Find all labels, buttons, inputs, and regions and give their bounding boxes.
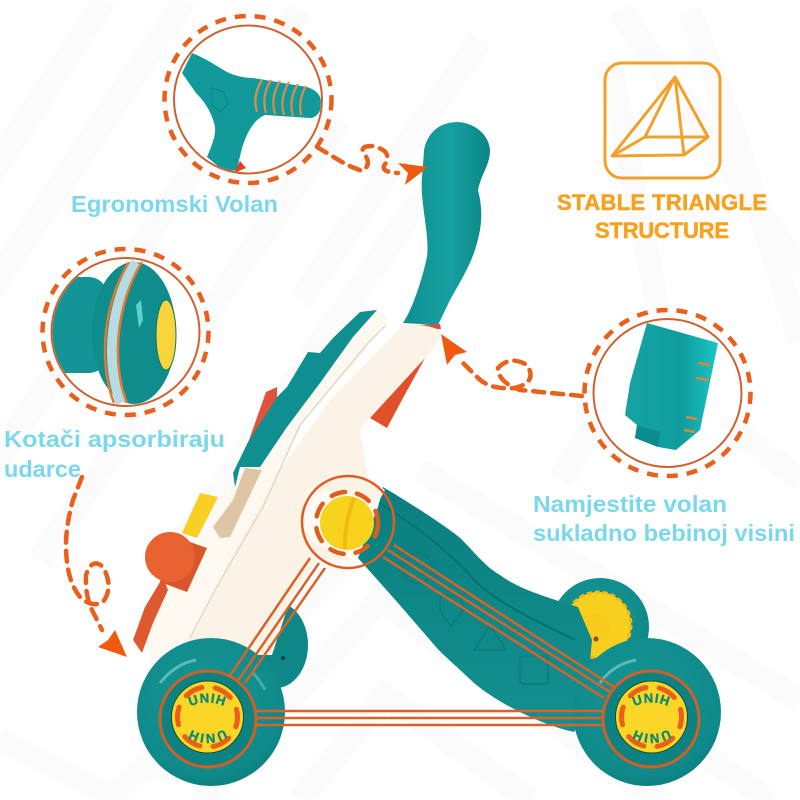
hub logo — [632, 693, 672, 744]
label: wheels absorb shocks: Kotači apsorbiraju — [4, 426, 225, 452]
red side piece — [248, 387, 277, 443]
wheel hub — [616, 681, 688, 753]
arm shape: triangle — [474, 625, 506, 650]
knob highlight circle — [302, 476, 394, 568]
stroller arm — [358, 487, 592, 732]
stroller hidden left wheel — [244, 602, 308, 688]
heading: stable triangle structure: STRUCTURE — [595, 218, 729, 243]
label: ergonomic handle: Egronomski Volan — [71, 191, 278, 217]
yellow adjustment knob — [320, 496, 374, 550]
yellow block toy — [182, 493, 218, 538]
label: wheels absorb shocks: udarce — [4, 456, 81, 482]
callout: shock-absorbing wheel — [42, 249, 208, 415]
label: wheels absorb shocks — [4, 426, 225, 482]
stroller handle — [403, 122, 490, 329]
heading: stable triangle structure — [557, 190, 767, 243]
arm shape: circle — [402, 553, 432, 583]
wheel ring — [603, 671, 699, 767]
wheel close-up — [45, 262, 176, 404]
callout: adjustable handle connector — [584, 310, 750, 476]
knob bracket — [302, 487, 380, 560]
heading: stable triangle structure: STABLE TRIANGLE — [557, 190, 767, 215]
arrow: to handle base — [441, 334, 582, 396]
callout: ergonomic handle — [164, 16, 332, 183]
tan slot — [213, 468, 262, 538]
triangle structure lines — [229, 545, 614, 725]
wheel ring — [160, 671, 256, 767]
front-left wheel — [137, 638, 285, 786]
hub logo: UNIH — [632, 730, 672, 744]
handle red tab — [418, 324, 441, 329]
arm shape: shield — [440, 596, 462, 626]
red brace — [370, 358, 425, 428]
hub logo: UNIH — [188, 693, 226, 706]
stroller body — [133, 310, 440, 662]
hub logo — [188, 693, 228, 744]
body front panel — [145, 310, 386, 662]
stroller rear wheel — [551, 578, 649, 676]
front-right wheel — [575, 638, 721, 786]
arrow: to front wheel — [66, 477, 127, 657]
arrow: to handle top — [317, 146, 428, 185]
connector close-up — [625, 323, 718, 450]
panel seam — [190, 325, 386, 638]
icon: pyramid in rounded square — [605, 63, 720, 178]
red stick toy — [133, 577, 168, 653]
teal tray strip — [233, 310, 377, 487]
label: adjust handle height — [533, 491, 795, 546]
wheel hub — [172, 681, 244, 753]
arm shape: square — [520, 656, 548, 684]
hub logo: UNIH — [188, 730, 228, 744]
hub logo: UNIH — [632, 693, 670, 706]
red cone toy — [145, 532, 207, 592]
label: adjust handle height: Namjestite volan — [533, 491, 727, 517]
label: adjust handle height: sukladno bebinoj visini — [533, 520, 795, 546]
icon: yellow gear hub — [565, 592, 631, 658]
handle close-up — [182, 53, 321, 173]
